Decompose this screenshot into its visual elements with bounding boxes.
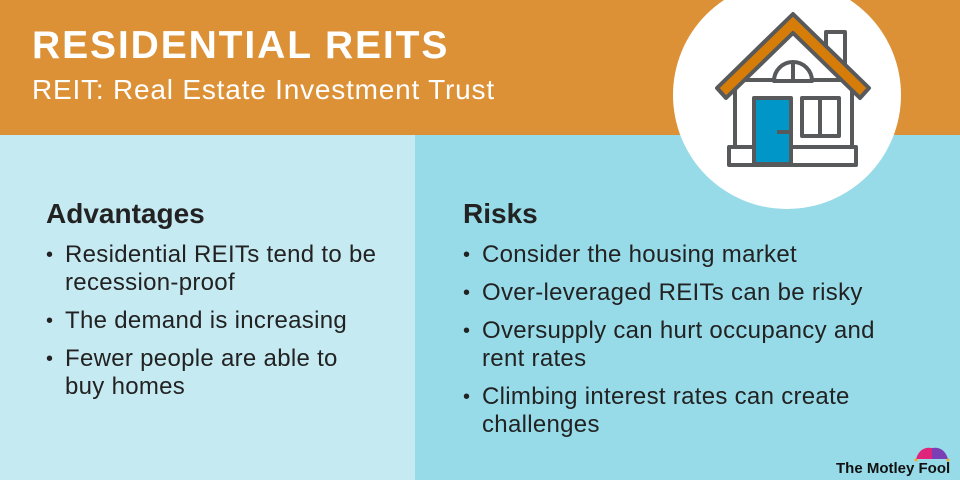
panel: advantages background xyxy=(0,135,415,480)
list: advantages xyxy=(46,241,376,400)
list: advantages: Residential REITs tend to be recession-proof xyxy=(65,241,376,296)
logo: The Motley Fool xyxy=(836,448,950,477)
subtitle: REIT: Real Estate Investment Trust xyxy=(32,74,495,105)
list: risks: Oversupply can hurt occupancy and rent rates xyxy=(482,317,875,372)
panel: risks xyxy=(463,198,875,438)
title: RESIDENTIAL REITS xyxy=(32,24,449,67)
panel: risks background xyxy=(415,135,960,480)
logo: The Motley Fool: The Motley Fool xyxy=(836,460,950,477)
list: risks: Consider the housing market xyxy=(482,241,797,268)
heading: advantages: Advantages xyxy=(46,198,205,229)
list: risks: Climbing interest rates can create challenges xyxy=(482,383,850,438)
list: risks: Over-leveraged REITs can be risky xyxy=(482,279,863,306)
panel: advantages xyxy=(46,198,376,400)
list: risks xyxy=(464,241,875,438)
heading: risks: Risks xyxy=(463,198,538,229)
list: advantages: The demand is increasing xyxy=(65,307,347,334)
header band xyxy=(0,0,960,135)
list: advantages: Fewer people are able to buy homes xyxy=(65,345,338,400)
